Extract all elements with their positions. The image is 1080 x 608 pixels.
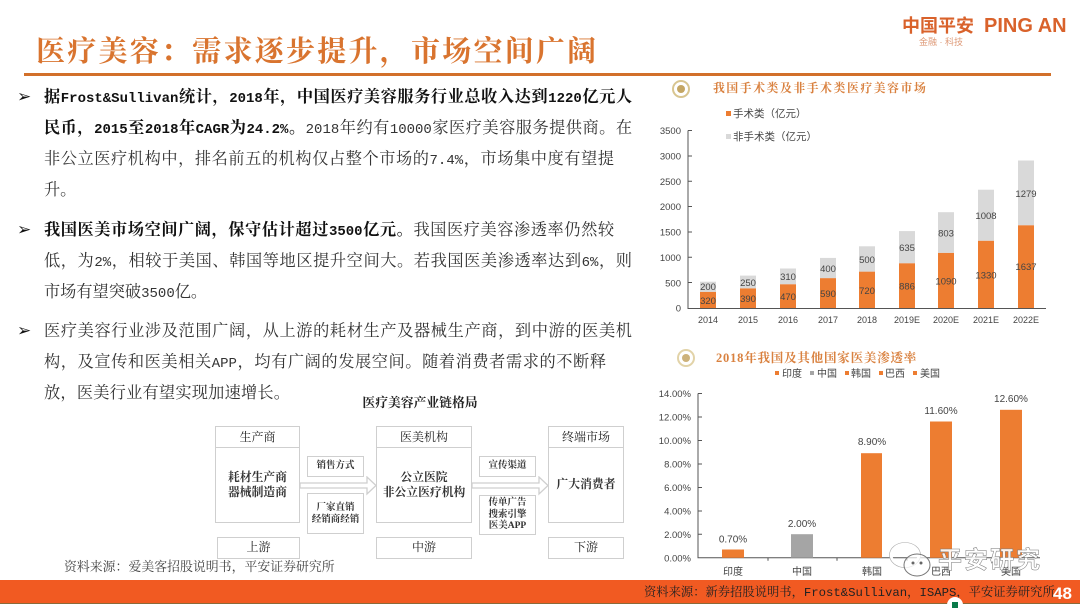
watermark [889, 542, 1042, 576]
bullet 2 text: ➢ [17, 220, 31, 240]
industry chain diagram: 器械制造商 [228, 485, 287, 499]
axes [698, 394, 1040, 561]
y axis labels: 2500 [660, 177, 681, 188]
promotion channel boxes: 宣传渠道 [488, 461, 526, 471]
bullet 2 text: 我国医美市场空间广阔，保守估计超过3500亿元。我国医疗美容渗透率仍然较 [44, 222, 614, 240]
promotion channel boxes [479, 456, 536, 477]
bullet 2 text [17, 220, 632, 302]
data labels: 590 [820, 289, 836, 300]
diagram heading: 医疗美容产业链格局 [362, 396, 478, 410]
y axis labels: 500 [665, 278, 681, 290]
bullet 1 text [17, 87, 632, 200]
bars [722, 550, 744, 558]
y axis labels: 3000 [660, 152, 681, 162]
y axis labels: 10.00% [659, 436, 692, 447]
column: end market [548, 426, 624, 448]
industry chain diagram: 非公立医疗机构 [383, 485, 465, 499]
data labels [719, 394, 1028, 546]
bullet 1 text: 升。 [44, 182, 76, 200]
x axis labels: 2022E [1013, 315, 1039, 325]
y axis labels: 12.00% [659, 412, 692, 424]
stage labels [217, 537, 300, 559]
y axis labels: 0 [676, 304, 681, 314]
industry chain diagram: 耗材生产商 [228, 470, 287, 484]
data labels: 8.90% [858, 437, 886, 448]
bullet 3 text: 医疗美容行业涉及范围广阔，从上游的耗材生产及器械生产商，到中游的医美机 [44, 323, 632, 341]
data labels: 720 [859, 286, 875, 297]
data labels: 2.00% [788, 519, 816, 530]
y axis labels [659, 389, 692, 564]
industry chain diagram: 厂家直销 [316, 503, 354, 513]
data labels: 500 [859, 255, 875, 266]
y axis labels: 2000 [660, 202, 681, 213]
x axis labels: 2021E [973, 315, 999, 325]
industry chain diagram: 传单广告 [488, 498, 526, 508]
category labels: 巴西 [931, 566, 951, 578]
category labels: 韩国 [862, 565, 882, 578]
y axis labels [660, 126, 681, 314]
y axis labels: 14.00% [659, 389, 692, 400]
data labels: 11.60% [924, 406, 958, 417]
title rule [24, 73, 1051, 76]
category labels: 美国 [1001, 565, 1021, 578]
non-surgical bars [700, 160, 1034, 292]
category labels [723, 565, 1021, 578]
industry chain diagram [215, 396, 624, 559]
y axis labels: 8.00% [664, 460, 692, 470]
data labels: 390 [740, 294, 756, 305]
column: end market: 终端市场 [562, 430, 610, 444]
industry chain diagram: 下游 [574, 540, 598, 554]
legend: 手术类（亿元） [733, 107, 806, 120]
arrow: institutions to market [472, 476, 548, 496]
data labels: 886 [899, 282, 915, 292]
column: medical institutions [376, 426, 472, 448]
column: producers [215, 426, 300, 448]
y axis labels: 6.00% [664, 483, 692, 494]
data labels: 1008 [975, 211, 997, 222]
legend: 印度 [782, 367, 802, 380]
data labels: 635 [899, 243, 915, 254]
y axis labels: 3500 [660, 126, 681, 137]
chart heading 2 [677, 349, 917, 367]
arrow: producers to institutions [300, 476, 376, 496]
industry chain diagram: 广大消费者 [556, 477, 616, 491]
data labels [700, 189, 1037, 307]
data labels: 1090 [935, 276, 957, 288]
data labels: 310 [780, 272, 796, 283]
bullet 3 text: 构，及宣传和医美相关APP，均有广阔的发展空间。随着消费者需求的不断释 [44, 354, 606, 372]
data labels: 1279 [1015, 189, 1037, 200]
chart heading 1: 我国手术类及非手术类医疗美容市场 [713, 81, 927, 95]
x axis labels: 2020E [933, 315, 959, 325]
chart heading 2: 2018年我国及其他国家医美渗透率 [716, 351, 917, 365]
legend: 韩国 [851, 367, 871, 380]
x axis labels: 2019E [894, 315, 920, 325]
data labels: 0.70% [719, 534, 747, 546]
category labels: 中国 [792, 565, 812, 578]
sales method boxes: 销售方式 [316, 461, 354, 471]
icon: footer logo tab [947, 597, 963, 608]
data labels: 250 [740, 278, 756, 289]
data labels: 400 [820, 264, 836, 275]
x axis labels: 2018 [857, 315, 877, 325]
page number: 48 [1053, 584, 1072, 603]
category labels: 印度 [723, 565, 743, 578]
surgical bars [700, 225, 1034, 308]
watermark: 平安研究 [938, 547, 1042, 574]
legend: 美国 [920, 367, 940, 380]
diagram source note: 资料来源：爱美客招股说明书，平安证券研究所 [64, 560, 335, 575]
x axis labels: 2014 [698, 315, 718, 325]
stage labels: 上游 [246, 540, 270, 554]
icon: target circle [672, 80, 690, 98]
logo: Ping An: 金融 · 科技 [919, 37, 963, 47]
footer source note: 资料来源：新券招股说明书，Frost&Sullivan，ISAPS，平安证券研究所 [644, 586, 1055, 600]
title: 医疗美容：需求逐步提升，市场空间广阔 [36, 36, 599, 68]
legend: 中国 [817, 367, 837, 380]
industry chain diagram: 经销商经销 [312, 515, 359, 525]
x axis labels: 2016 [778, 315, 798, 325]
data labels: 1330 [975, 270, 997, 282]
legend [775, 367, 940, 380]
y axis labels: 0.00% [664, 554, 692, 564]
x axis labels [698, 315, 1039, 325]
column: medical institutions: 医美机构 [400, 430, 448, 444]
data labels: 803 [938, 228, 954, 240]
legend: 巴西 [885, 368, 905, 380]
industry chain diagram: 医美APP [489, 521, 526, 531]
y axis labels: 1000 [660, 253, 681, 264]
logo: Ping An: 中国平安 [902, 16, 974, 36]
bullet 3 text: ➢ [17, 321, 31, 341]
bullet 2 text: 低，为2%，相较于美国、韩国等地区提升空间大。若我国医美渗透率达到6%，则 [44, 253, 632, 271]
footer bar [0, 580, 1080, 604]
y axis labels: 4.00% [664, 506, 692, 518]
data labels: 200 [700, 282, 716, 293]
y axis labels: 2.00% [664, 530, 692, 541]
bullet 3 text: 放，医美行业有望实现加速增长。 [44, 385, 290, 403]
logo: Ping An: PING AN [984, 15, 1067, 37]
industry chain diagram: 中游 [412, 540, 436, 554]
bullet 1 text: 据Frost&Sullivan统计，2018年，中国医疗美容服务行业总收入达到1220亿元人 [44, 89, 632, 107]
icon: chat bubbles [889, 542, 930, 576]
icon: target circle [677, 349, 695, 367]
bullet 1 text: 非公立医疗机构中，排名前五的机构仅占整个市场的7.4%，市场集中度有望提 [44, 151, 614, 169]
logo: Ping An [902, 15, 1067, 47]
bullet 2 text: 市场有望突破3500亿。 [44, 284, 207, 302]
x axis labels: 2017 [818, 315, 838, 325]
industry chain diagram: 搜索引擎 [488, 510, 526, 520]
axes [688, 130, 1046, 308]
legend [726, 107, 817, 143]
industry chain diagram: 公立医院 [400, 470, 448, 484]
data labels: 320 [700, 296, 716, 307]
bullet 1 text: 民币，2015至2018年CAGR为24.2%。2018年约有10000家医疗美容服务提供商。在 [44, 120, 632, 138]
sales method boxes [307, 456, 364, 477]
y axis labels: 1500 [660, 228, 681, 238]
column: producers: 生产商 [239, 430, 276, 444]
data labels: 1637 [1015, 262, 1037, 273]
bullet 1 text: ➢ [17, 87, 31, 107]
x axis labels: 2015 [738, 315, 758, 325]
legend: 非手术类（亿元） [733, 130, 817, 143]
bullet 3 text [17, 321, 632, 403]
data labels: 470 [780, 292, 796, 303]
chart heading 1 [672, 80, 927, 98]
data labels: 12.60% [994, 394, 1028, 405]
